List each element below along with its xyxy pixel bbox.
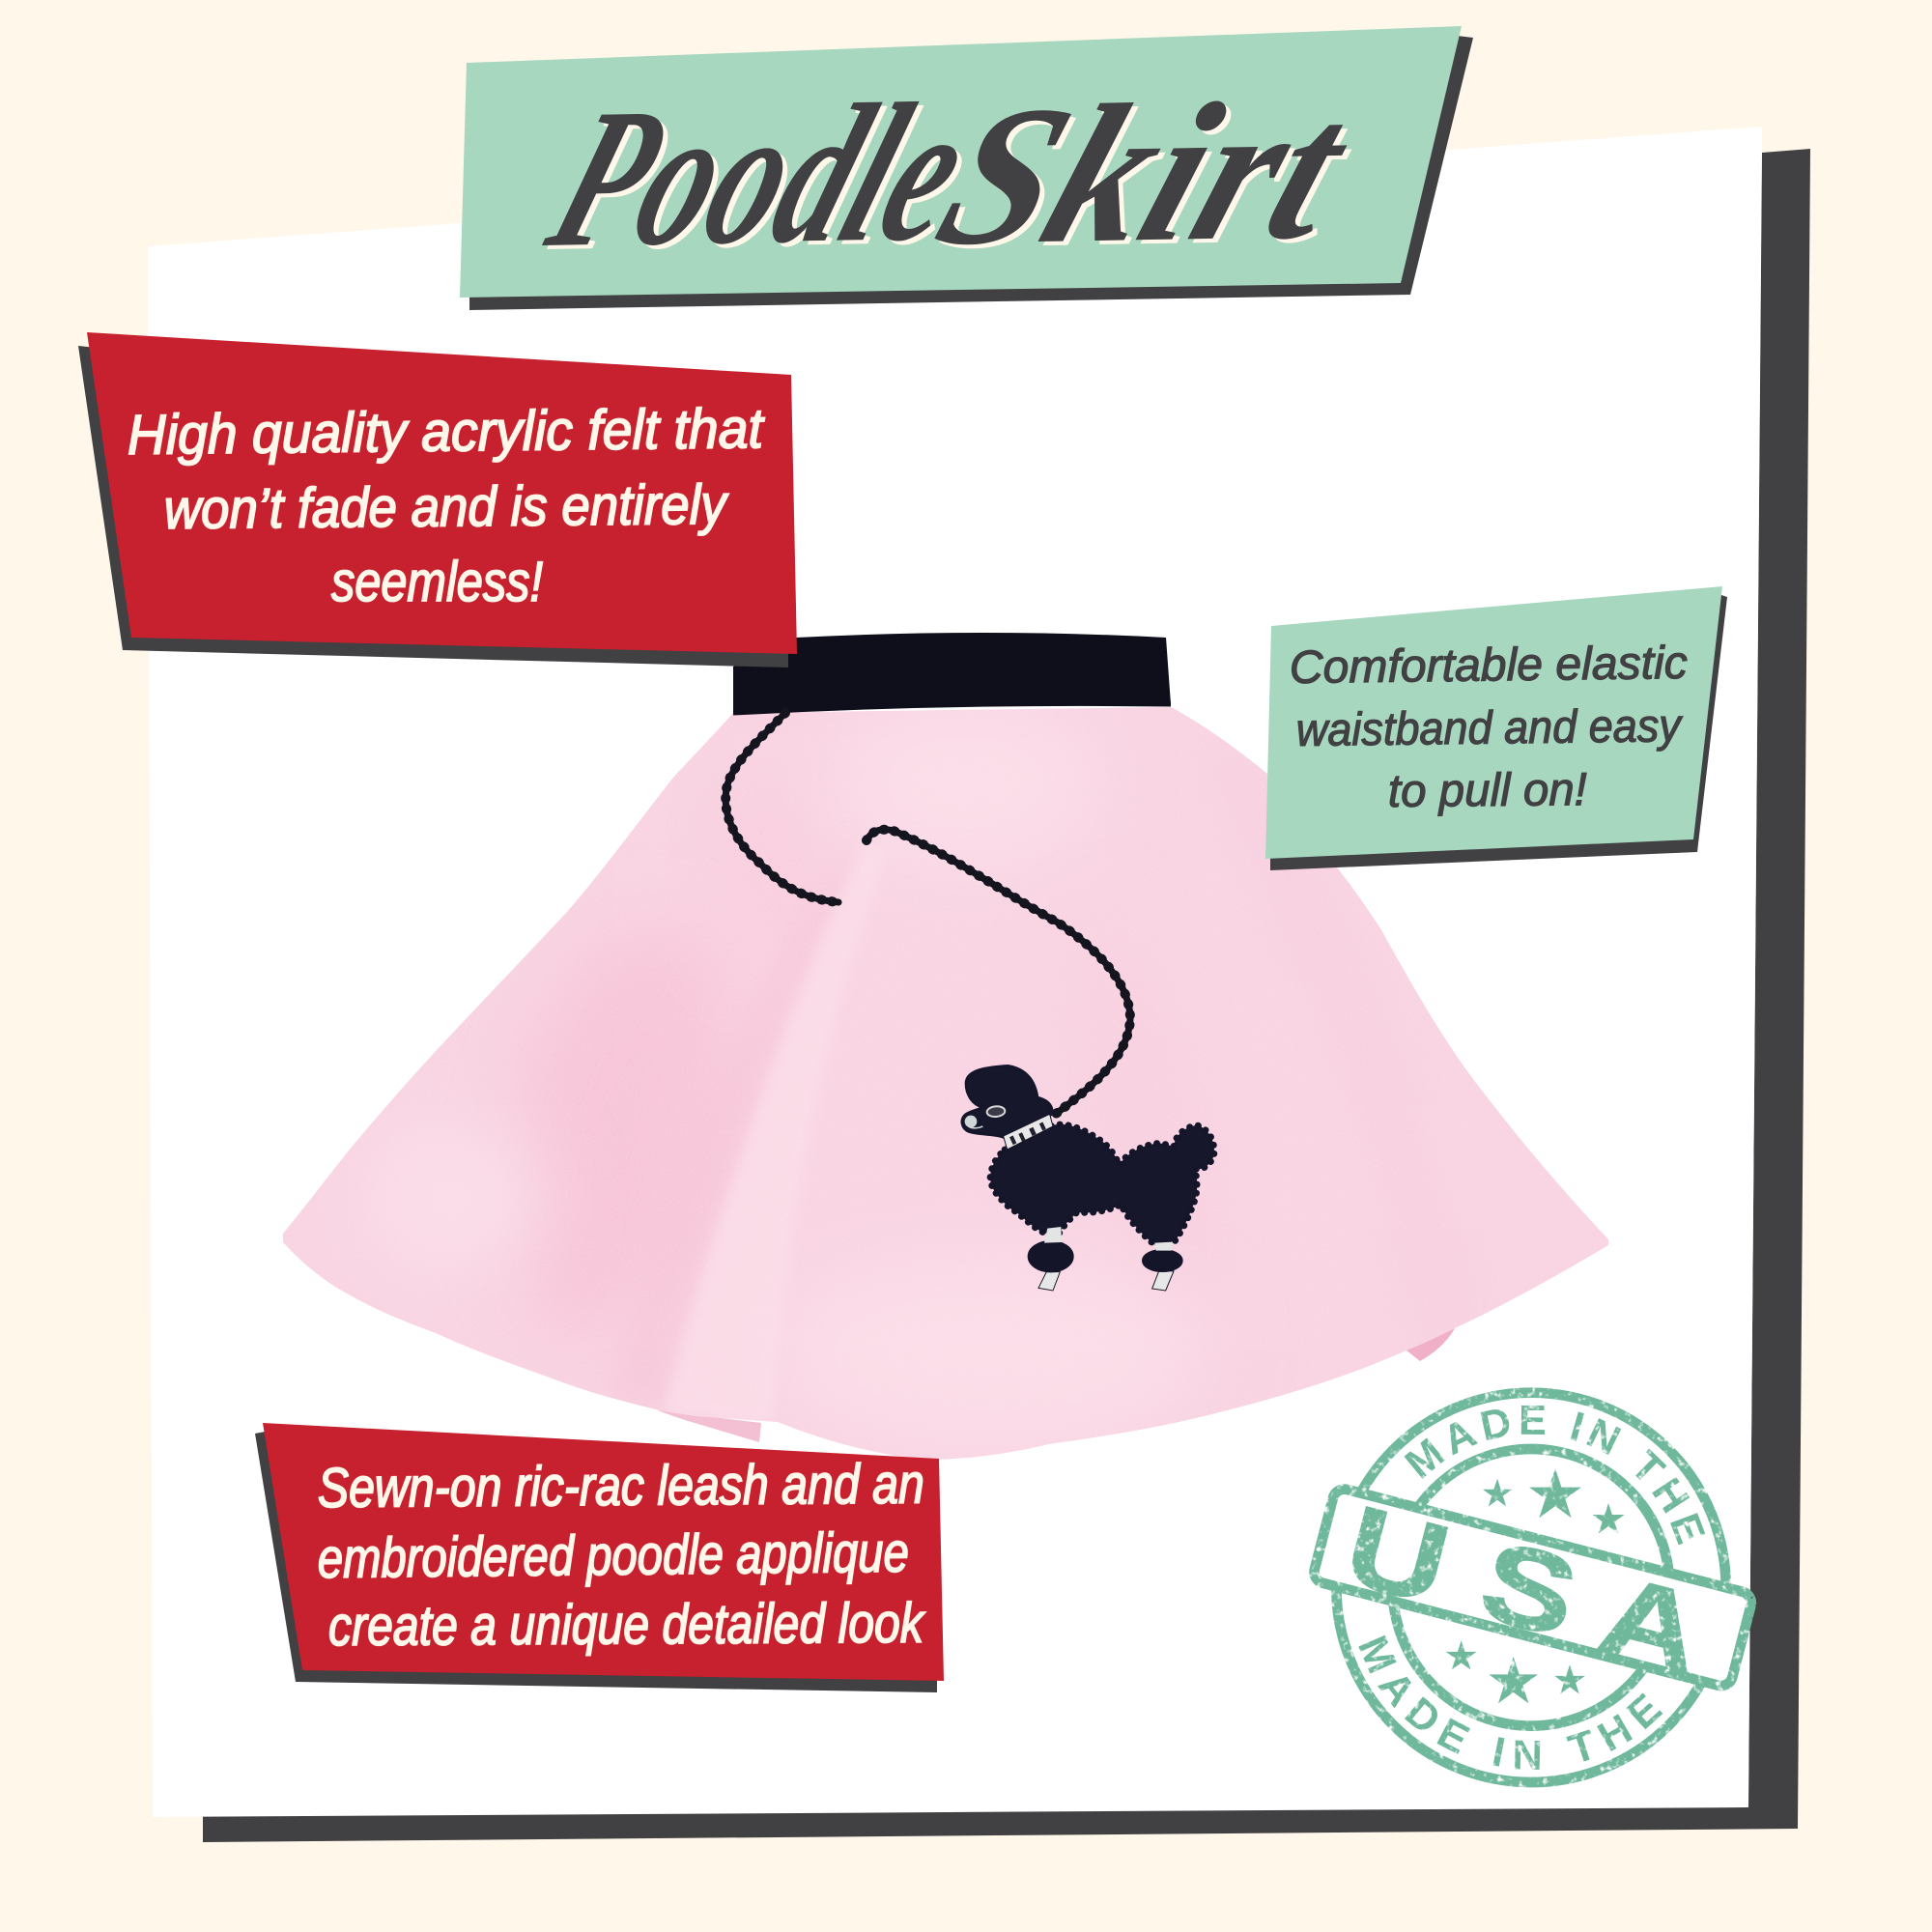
callout shadow	[1270, 591, 1727, 870]
callout shadow	[255, 1430, 937, 1692]
title banner shadow	[469, 35, 1473, 310]
stamp USA letters: U	[1333, 1481, 1462, 1629]
callout text: High quality acrylic felt that	[127, 397, 766, 467]
callout text: embroidered poodle applique	[317, 1521, 909, 1590]
poodle body	[990, 1124, 1214, 1244]
poodle eye	[986, 1106, 1006, 1118]
title banner	[460, 26, 1473, 310]
callout text: seemless!	[331, 551, 543, 613]
callout: leash and applique	[255, 1423, 944, 1692]
felt skirt body	[270, 676, 1623, 1478]
stamp curved text bottom: MADE IN THE	[1358, 1634, 1663, 1770]
poodle back ankle	[1154, 1242, 1173, 1251]
callout: elastic waistband	[1265, 586, 1727, 870]
callout face	[1265, 586, 1722, 859]
stamp USA letters	[1333, 1481, 1716, 1698]
callout text: Comfortable elastic	[1289, 638, 1688, 694]
callout text	[317, 1453, 926, 1658]
poodle back foot	[1152, 1270, 1174, 1291]
callout text: Sewn-on ric-rac leash and an	[318, 1453, 924, 1520]
callout text: won’t fade and is entirely	[164, 473, 729, 541]
ric-rac leash upper	[725, 713, 838, 902]
waistband edge	[733, 703, 1171, 713]
callout shadow	[78, 346, 788, 668]
callout face	[87, 332, 797, 654]
callout: felt quality	[78, 332, 797, 668]
panel shadow	[203, 149, 1810, 1842]
callout text: to pull on!	[1388, 764, 1587, 817]
stamp stars	[1446, 1468, 1624, 1703]
poodle mouth	[969, 1126, 982, 1128]
title text: Skirt	[915, 59, 1378, 287]
skirt photo illustration	[270, 633, 1623, 1478]
callout text: create a unique detailed look	[328, 1592, 926, 1658]
poodle collar	[1004, 1114, 1053, 1150]
callout text	[1289, 638, 1688, 817]
callout face	[263, 1423, 944, 1681]
stamp banner	[1312, 1487, 1753, 1689]
title banner face	[460, 26, 1462, 298]
stamp USA letters: A	[1588, 1550, 1716, 1698]
stamp: made in the USA	[1309, 1387, 1756, 1787]
callout text	[127, 397, 766, 613]
stamp USA letters: S	[1469, 1516, 1589, 1662]
back fold right	[1406, 1328, 1455, 1361]
waistband	[733, 633, 1171, 713]
stamp outer ring	[1336, 1393, 1726, 1782]
title text: Skirt	[920, 63, 1382, 291]
poodle front foot	[1038, 1272, 1060, 1291]
poodle nose	[965, 1116, 977, 1127]
ric-rac leash lower	[867, 830, 1130, 1114]
back fold left	[657, 1410, 761, 1442]
poodle applique	[962, 1065, 1214, 1291]
poodle head	[962, 1065, 1052, 1138]
poodle paws	[1030, 1242, 1181, 1270]
poodle front ankle	[1044, 1227, 1062, 1243]
stamp inner ring	[1393, 1449, 1669, 1726]
title text: Poodle	[526, 61, 994, 289]
callout text: waistband and easy	[1295, 700, 1684, 756]
stamp curved text top: MADE IN THE	[1405, 1406, 1706, 1546]
title text: Poodle	[531, 65, 999, 293]
white panel	[148, 127, 1762, 1817]
